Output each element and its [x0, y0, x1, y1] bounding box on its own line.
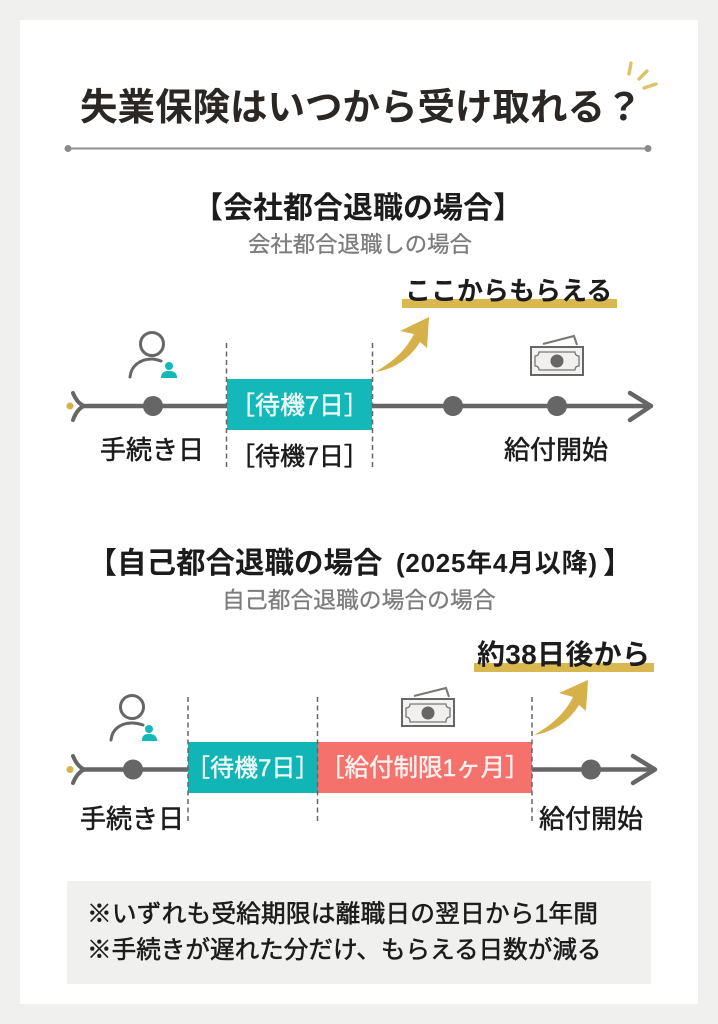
timeline 2 [66, 756, 655, 783]
dashed markers [226, 343, 372, 467]
heading: self-initiated: (2025年4月以降) [396, 548, 597, 578]
label: waiting 7 days: ［待機7日］ [230, 443, 369, 471]
benefit restriction bar [318, 742, 532, 793]
note line 1: ※いずれも受給期限は離職日の翌日から1年間 [87, 900, 598, 928]
dashed markers [188, 697, 532, 822]
icon: title sparkle [629, 63, 656, 88]
waiting period bar: ［待機7日］ [230, 392, 369, 420]
icon: banknote [402, 688, 454, 726]
panel: self-initiated resignation [66, 547, 655, 834]
arrow: gold up [375, 317, 429, 372]
note box [67, 881, 651, 984]
title divider [64, 145, 652, 152]
panel: company-initiated resignation [66, 192, 651, 471]
title: 失業保険はいつから受け取れる？ [80, 86, 642, 128]
heading: self-initiated: 【自己都合退職の場合 [88, 547, 383, 580]
waiting period bar: ［待機7日］ [186, 755, 319, 782]
timeline 1 [66, 393, 651, 420]
callout: from about 38 days later: 約38日後から [477, 639, 650, 670]
waiting period bar [186, 742, 319, 793]
label: application day: 手続き日 [100, 435, 204, 465]
callout: paid from here: ここからもらえる [405, 276, 612, 306]
icon: person [111, 696, 157, 741]
benefit restriction bar: ［給付制限1ヶ月］ [320, 754, 530, 782]
icon: person [130, 332, 177, 378]
note line 2: ※手続きが遅れた分だけ、もらえる日数が減る [87, 936, 602, 964]
label: benefit start: 給付開始 [539, 804, 643, 834]
waiting period bar [227, 379, 372, 430]
arrow: gold up [534, 680, 588, 735]
heading: self-initiated [88, 547, 633, 580]
heading: company-initiated: 【会社都合退職の場合】 [193, 192, 523, 225]
subheading: self-initiated: 自己都合退職の場合の場合 [222, 587, 496, 613]
icon: banknote [531, 336, 583, 375]
label: application day: 手続き日 [80, 804, 184, 834]
heading: self-initiated: 】 [603, 547, 633, 580]
subheading: company-initiated: 会社都合退職しの場合 [248, 232, 472, 257]
label: benefit start: 給付開始 [504, 435, 608, 465]
